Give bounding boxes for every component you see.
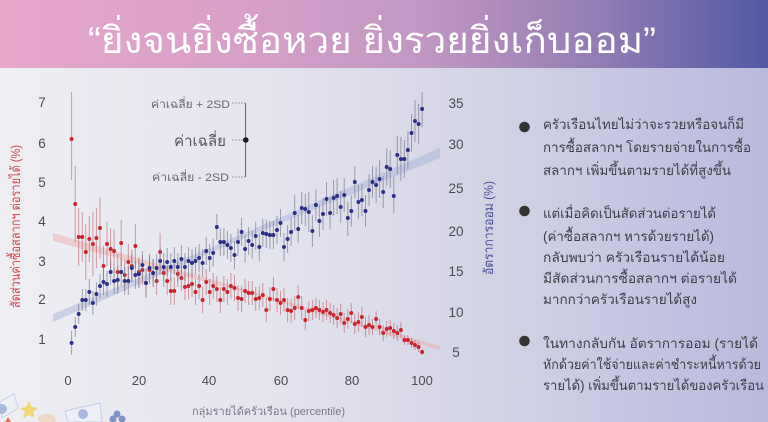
x axis labels: 0	[64, 373, 72, 388]
x axis labels: 100	[411, 373, 433, 388]
finding 2	[519, 204, 737, 308]
right y axis labels: 25	[448, 181, 464, 196]
x axis labels: 60	[274, 373, 288, 388]
trend band: lottery share	[53, 233, 440, 350]
finding 2: (ค่าซื้อสลากฯ หารด้วยรายได้)	[543, 226, 714, 244]
x axis labels	[64, 373, 433, 388]
chart	[6, 92, 496, 418]
legend: mean and 2SD: ค่าเฉลี่ย - 2SD	[152, 169, 229, 184]
finding 1: สลากฯ เพิ่มขึ้นตามรายได้ที่สูงขึ้น	[543, 160, 731, 179]
legend: mean and 2SD	[151, 96, 249, 184]
series: lottery share (red)	[72, 92, 422, 355]
title: “ยิ่งจนยิ่งซื้อหวย ยิ่งรวยยิ่งเก็บออม”	[88, 13, 656, 61]
left y axis title: สัดส่วนค่าซื้อสลากฯ ต่อรายได้ (%)	[6, 145, 23, 308]
series: saving rate (blue)	[72, 92, 422, 355]
left y axis labels: 1	[38, 332, 46, 347]
x axis title: กลุ่มรายได้ครัวเรือน (percentile)	[192, 405, 345, 418]
left y axis labels: 4	[38, 214, 46, 229]
right y axis labels: 20	[448, 224, 464, 239]
finding 2: มีสัดส่วนการซื้อสลากฯ ต่อรายได้	[543, 268, 737, 286]
left y axis labels: 2	[38, 292, 46, 307]
finding 3: รายได้) เพิ่มขึ้นตามรายได้ของครัวเรือน	[543, 375, 764, 393]
right y axis labels: 35	[448, 96, 464, 111]
x axis labels: 40	[202, 373, 216, 388]
finding 3	[519, 335, 764, 393]
x axis labels: 80	[345, 373, 359, 388]
decorative money and card icons	[0, 394, 126, 422]
finding 1	[519, 115, 751, 179]
legend: mean and 2SD: ค่าเฉลี่ย + 2SD	[151, 96, 230, 111]
right y axis labels: 5	[452, 345, 460, 360]
right y axis labels: 10	[448, 305, 464, 320]
finding 1: การซื้อสลากฯ โดยรายจ่ายในการซื้อ	[543, 137, 751, 155]
header band	[0, 0, 768, 68]
left y axis labels	[38, 95, 46, 347]
left y axis labels: 6	[38, 136, 46, 151]
right y axis labels: 30	[448, 137, 464, 152]
left y axis labels: 7	[38, 95, 46, 110]
finding 2: มากกว่าครัวเรือนรายได้สูง	[543, 292, 697, 308]
x axis labels: 20	[132, 373, 146, 388]
finding 2: แต่เมื่อคิดเป็นสัดส่วนต่อรายได้	[543, 204, 716, 221]
right y axis title: อัตราการออม (%)	[481, 181, 496, 275]
finding 1: ครัวเรือนไทยไม่ว่าจะรวยหรือจนก็มี	[543, 115, 744, 132]
finding 2: กลับพบว่า ครัวเรือนรายได้น้อย	[543, 250, 725, 265]
left y axis labels: 3	[38, 254, 46, 269]
legend: mean and 2SD: ค่าเฉลี่ย	[174, 130, 226, 150]
trend band: saving rate	[53, 148, 440, 322]
text panel: findings	[519, 115, 764, 393]
left y axis labels: 5	[38, 175, 46, 190]
right y axis labels: 15	[448, 264, 464, 279]
right y axis labels	[448, 96, 464, 360]
finding 3: ในทางกลับกัน อัตราการออม (รายได้	[543, 335, 758, 351]
